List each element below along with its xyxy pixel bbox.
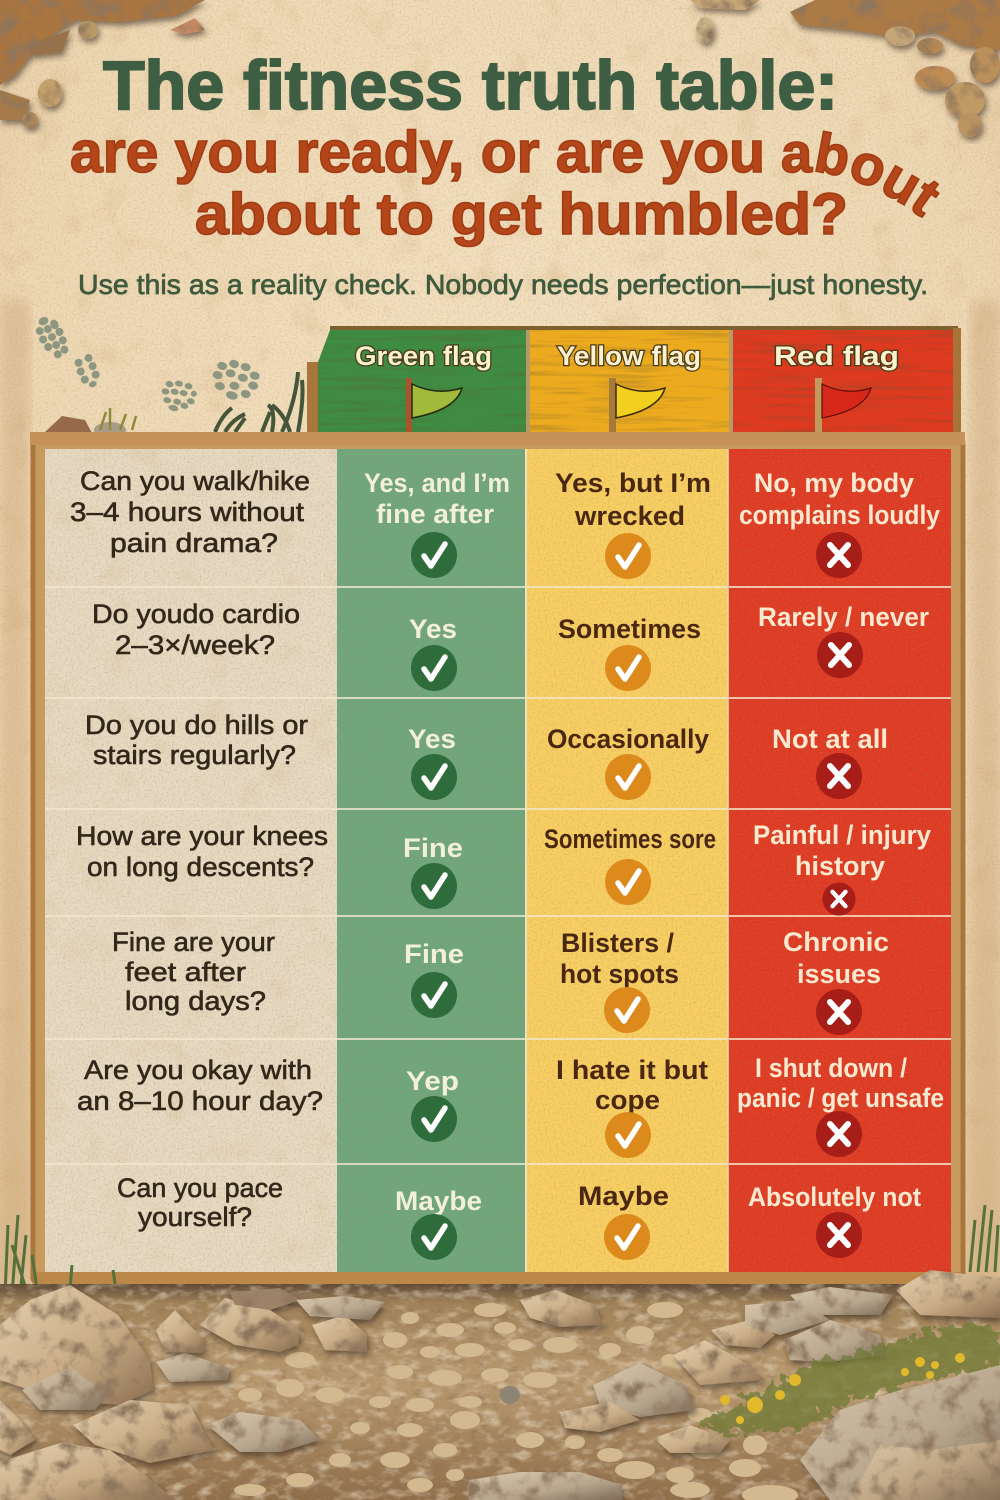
- column backgrounds: [45, 449, 951, 1272]
- question: Do you do hills or: [85, 710, 308, 740]
- yellow answer: [556, 1055, 708, 1158]
- corner stones: top left: [0, 0, 205, 128]
- yellow answer: I hate it but: [556, 1055, 708, 1085]
- red answer: [753, 820, 931, 916]
- yellow answer: [558, 614, 701, 691]
- green header: [318, 330, 528, 433]
- red answer: Chronic: [783, 927, 889, 957]
- icon: yellow flag: [609, 378, 665, 433]
- green answer: [406, 1066, 459, 1142]
- green answer: [403, 833, 463, 909]
- question: How are your knees: [76, 821, 328, 851]
- row 4: [76, 820, 931, 916]
- title line 2: [70, 120, 940, 218]
- question: [77, 1055, 323, 1116]
- question: 3–4 hours without: [70, 497, 305, 527]
- yellow answer: Sometimes sore: [544, 824, 716, 854]
- question: Can you pace: [117, 1173, 283, 1203]
- title line 2: are you ready, or are you: [70, 120, 765, 185]
- red answer: panic / get unsafe: [737, 1083, 944, 1113]
- boulders: [0, 1270, 1000, 1500]
- green answer: [404, 939, 464, 1018]
- grass and yellow flowers: [695, 1325, 1000, 1432]
- question: [76, 821, 328, 882]
- question: pain drama?: [110, 528, 278, 558]
- corner stones: top right: [690, 0, 1000, 137]
- red header: [731, 330, 957, 433]
- green answer: Fine: [404, 939, 464, 969]
- row lines: [45, 449, 951, 1272]
- yellow answer: Blisters /: [561, 928, 674, 958]
- green answer: [408, 724, 457, 800]
- red answer: Absolutely not: [748, 1182, 921, 1212]
- green answer: fine after: [376, 499, 495, 529]
- question: stairs regularly?: [93, 740, 296, 770]
- icon: red flag: [815, 378, 871, 433]
- red answer: I shut down /: [755, 1053, 907, 1083]
- question: [92, 599, 300, 660]
- yellow answer: Yes, but I’m: [555, 468, 711, 498]
- red answer: complains loudly: [739, 500, 940, 530]
- panel: truth table: [30, 432, 965, 1284]
- question: on long descents?: [87, 852, 314, 882]
- yellow answer: Sometimes: [558, 614, 701, 644]
- green answer: [409, 614, 457, 691]
- green answer: Yes: [408, 724, 456, 754]
- question: long days?: [125, 986, 266, 1016]
- foreground rocks: [800, 1365, 1000, 1500]
- red answer: Painful / injury: [753, 820, 931, 850]
- question: [117, 1173, 283, 1232]
- icon: footprints: [30, 311, 263, 416]
- yellow answer: [555, 468, 711, 579]
- yellow answer: Occasionally: [547, 724, 709, 754]
- green answer: Maybe: [395, 1186, 482, 1216]
- subtitle: Use this as a reality check. Nobody needs perfection—just honesty.: [78, 269, 928, 300]
- red answer: history: [795, 851, 885, 881]
- question: [112, 927, 275, 1016]
- panel: flag header sign: [307, 326, 961, 433]
- row 3: [85, 710, 888, 800]
- question: feet after: [125, 957, 246, 987]
- row 6: [77, 1053, 944, 1158]
- red answer: No, my body: [754, 468, 914, 498]
- green answer: Yep: [406, 1066, 459, 1096]
- row 2: [92, 599, 929, 691]
- title line 2: about: [782, 130, 940, 218]
- red answer: [772, 724, 888, 799]
- yellow answer: [560, 928, 679, 1033]
- yellow answer: cope: [595, 1085, 660, 1115]
- green answer: Yes, and I’m: [364, 468, 510, 498]
- grass and stones beside sign: [45, 372, 302, 438]
- yellow answer: Maybe: [578, 1181, 669, 1211]
- heading: yellow flag: Yellow flag: [557, 341, 701, 371]
- pebbles on trail: [234, 1292, 798, 1500]
- row 1: [70, 466, 940, 579]
- title: [70, 47, 940, 218]
- question: Fine are your: [112, 927, 275, 957]
- question: [85, 710, 308, 770]
- table frame: [33, 440, 963, 1282]
- yellow header: [528, 330, 731, 433]
- question: 2–3×/week?: [115, 630, 275, 660]
- title line 3: about to get humbled?: [195, 182, 848, 247]
- title line 1: The fitness truth table:: [103, 47, 838, 124]
- row 7: [117, 1173, 921, 1260]
- yellow answer: [544, 824, 716, 905]
- red answer: [758, 602, 929, 678]
- question: Can you walk/hike: [80, 466, 310, 496]
- row 5: [112, 927, 889, 1035]
- icon: green flag: [406, 378, 462, 433]
- question: Are you okay with: [84, 1055, 312, 1085]
- question: [70, 466, 310, 558]
- red answer: [739, 468, 940, 578]
- green answer: [364, 468, 510, 578]
- green answer: Yes: [409, 614, 457, 644]
- heading: green flag: Green flag: [355, 341, 492, 371]
- yellow answer: hot spots: [560, 959, 679, 989]
- green answer: [395, 1186, 482, 1260]
- yellow answer: wrecked: [574, 501, 685, 531]
- red answer: Rarely / never: [758, 602, 929, 632]
- red answer: [737, 1053, 944, 1157]
- green answer: Fine: [403, 833, 463, 863]
- grass at frame corners: [5, 1205, 998, 1295]
- red answer: Not at all: [772, 724, 888, 754]
- heading: red flag: Red flag: [774, 341, 899, 371]
- question: Do youdo cardio: [92, 599, 300, 629]
- question: an 8–10 hour day?: [77, 1086, 323, 1116]
- yellow answer: [578, 1181, 669, 1260]
- red answer: issues: [797, 959, 881, 989]
- yellow answer: [547, 724, 709, 800]
- rocky trail ground: [0, 1284, 1000, 1500]
- question: yourself?: [138, 1202, 252, 1232]
- red answer: [783, 927, 889, 1035]
- red answer: [748, 1182, 921, 1258]
